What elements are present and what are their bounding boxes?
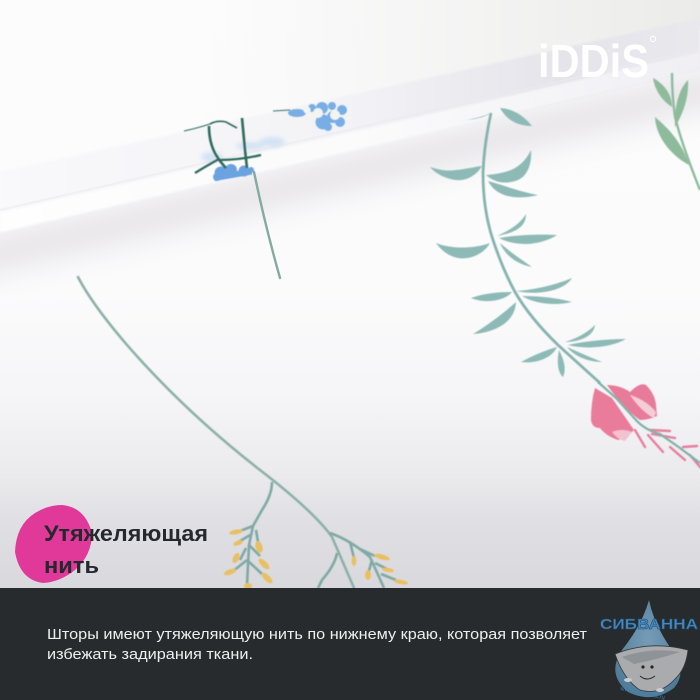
- teal leaves: [430, 108, 626, 377]
- faded flowers through the fold: [201, 137, 285, 162]
- heading: нить: [44, 553, 99, 578]
- buds and pink stems: [635, 430, 700, 467]
- heading: [44, 521, 208, 578]
- branch stem: [483, 113, 600, 383]
- main stem: [78, 277, 354, 588]
- logo: IDDIS: iDDiS: [538, 35, 649, 87]
- petals: [591, 388, 634, 440]
- pink blob accent: [15, 505, 92, 583]
- tub face: [641, 665, 645, 669]
- curtain hem fold band: [0, 18, 700, 232]
- right hanging branch: [430, 108, 626, 383]
- shadow under the fold: [0, 82, 700, 262]
- watermark logo: Sibvanna: [600, 600, 698, 700]
- blue flower on the hem: [184, 102, 351, 181]
- description text: [47, 626, 587, 663]
- yellow buds: [223, 528, 408, 589]
- description text: Шторы имеют утяжеляющую нить по нижнему краю, которая позволяет: [47, 626, 587, 643]
- bathtub: [615, 646, 688, 692]
- short stem below the hem: [254, 172, 280, 278]
- dark footer panel: [0, 588, 700, 700]
- water drop: [615, 600, 681, 697]
- bottom long stem with yellow buds: [78, 277, 408, 589]
- pink flower: [591, 382, 700, 467]
- branches: [232, 482, 396, 588]
- dark green stems on the hem: [184, 118, 261, 173]
- flower stem: [598, 382, 700, 463]
- top-right green sprig: [653, 73, 700, 190]
- heading: Утяжеляющая: [44, 521, 208, 546]
- tub feet: [624, 678, 632, 682]
- brand name: СИБВАННА: [600, 616, 698, 633]
- description text: избежать задирания ткани.: [47, 646, 253, 663]
